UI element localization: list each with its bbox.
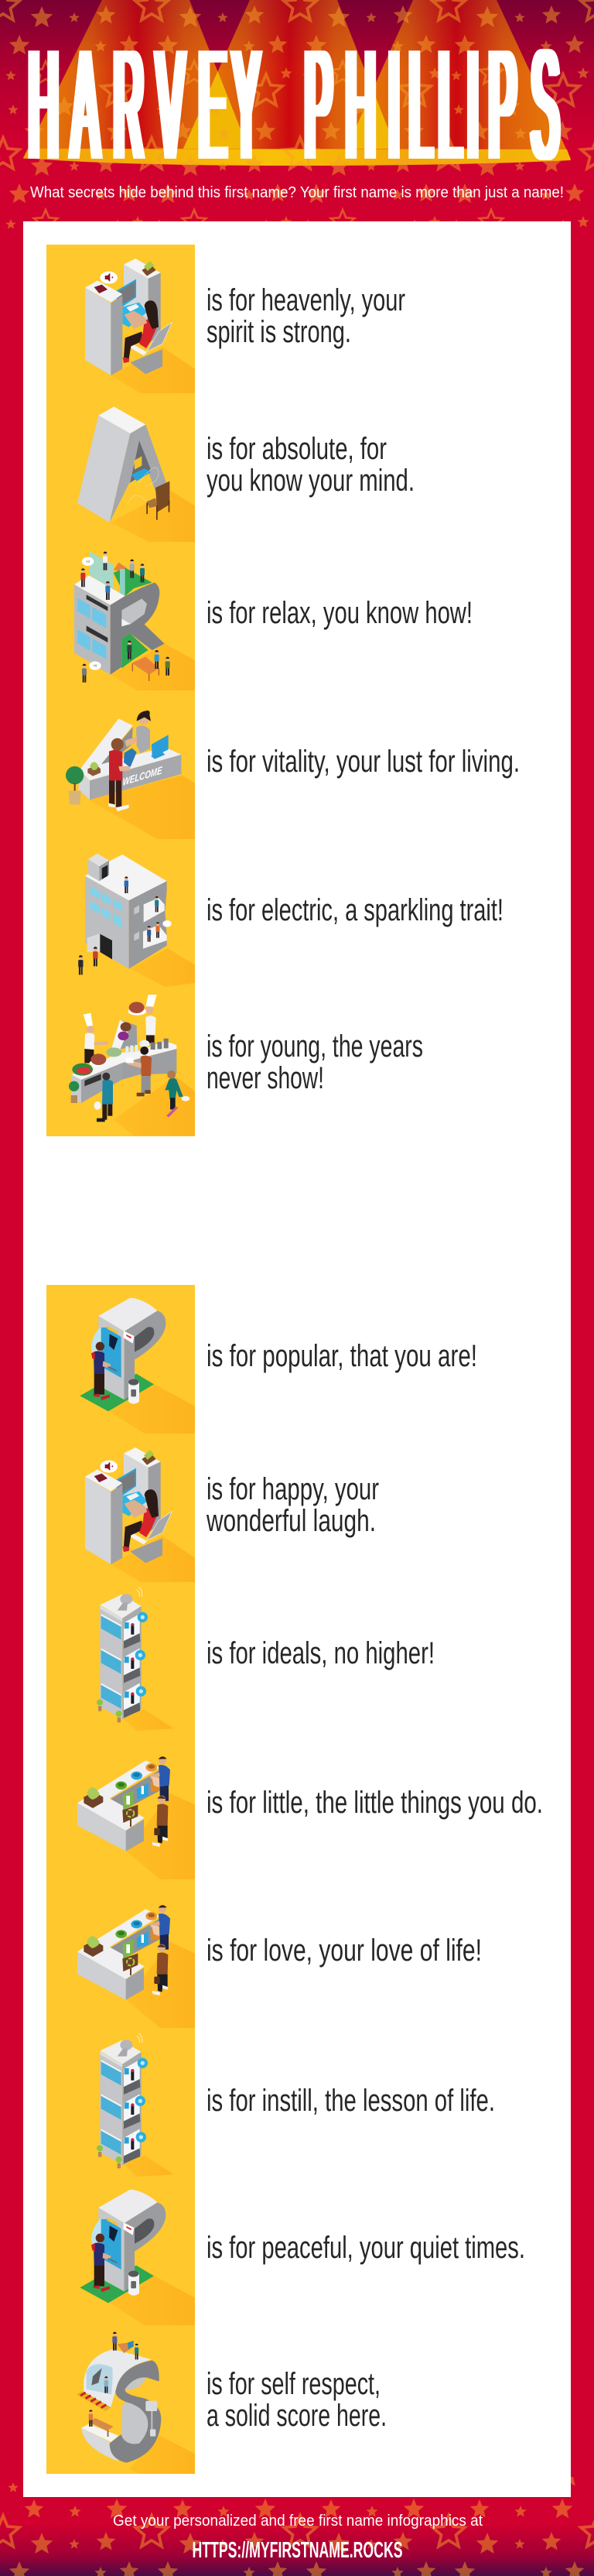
icon: letter I tower <box>97 2033 174 2177</box>
row: R relax <box>74 552 473 690</box>
icon: letter R office: HI <box>94 664 97 668</box>
text: H line: is for heavenly, your <box>207 283 405 317</box>
text: S line: a solid score here. <box>207 2399 387 2433</box>
row: L love <box>77 1905 482 2028</box>
text: H line: spirit is strong. <box>207 315 351 349</box>
row: S self respect <box>77 2332 387 2474</box>
text: S line: is for self respect, <box>207 2367 381 2401</box>
row: V vitality <box>66 711 520 839</box>
icon: letter Y buffet <box>69 995 195 1136</box>
row: I instill <box>97 2033 495 2177</box>
icon: letter L recycling <box>77 1756 195 1879</box>
text: L2 line: is for love, your love of life! <box>207 1934 482 1968</box>
icon: letter H desk <box>85 259 195 393</box>
text: H2 line: is for happy, your <box>207 1472 379 1506</box>
row: A absolute <box>77 406 415 542</box>
row: Y young <box>69 995 423 1136</box>
row: L little <box>77 1756 543 1879</box>
icon: letter V reception <box>66 711 195 839</box>
star pattern: header <box>0 0 594 232</box>
title: HARVEY PHILLIPS <box>29 18 559 193</box>
row: P peaceful <box>80 2190 525 2325</box>
text: A line: is for absolute, for <box>207 432 387 466</box>
text: I2 line: is for instill, the lesson of life. <box>207 2084 495 2118</box>
icon: letter A <box>77 406 195 542</box>
text: R line: is for relax, you know how! <box>207 596 473 630</box>
yellow column: last name <box>46 1285 195 2474</box>
icon: letter P ATM <box>80 2190 195 2325</box>
icon: letter L recycling <box>77 1905 195 2028</box>
icon: letter E building <box>78 854 195 987</box>
icon: letter I tower <box>97 1588 174 1731</box>
row: H happy <box>85 1447 379 1582</box>
icon: letter S office <box>77 2332 195 2474</box>
row: E electric <box>78 854 504 987</box>
row: H heavenly <box>85 259 405 393</box>
row: I ideals <box>97 1588 435 1731</box>
text: I line: is for ideals, no higher! <box>207 1636 435 1670</box>
text: H2 line: wonderful laugh. <box>206 1504 376 1538</box>
yellow column: first name <box>46 245 195 1136</box>
text: P line: is for popular, that you are! <box>207 1339 477 1373</box>
text: Y line: never show! <box>207 1061 324 1095</box>
row: P popular <box>80 1298 477 1434</box>
subtitle: What secrets hide behind this first name? Your first name is more than just a name! <box>30 184 564 201</box>
icon: letter R office: HI <box>86 560 90 564</box>
icon: letter P ATM <box>80 1298 195 1434</box>
text: Y line: is for young, the years <box>207 1029 423 1064</box>
icon: letter H desk <box>85 1447 195 1582</box>
star pattern: footer <box>0 2477 594 2576</box>
footer url: HTTPS://MYFIRSTNAME.ROCKS <box>192 2538 402 2563</box>
icon: letter R office <box>74 552 195 690</box>
text: A line: you know your mind. <box>207 464 415 498</box>
icon: letter V reception: WELCOME <box>122 764 163 788</box>
spotlights <box>0 0 594 166</box>
footer text: Get your personalized and free first name infographics at <box>113 2513 483 2530</box>
